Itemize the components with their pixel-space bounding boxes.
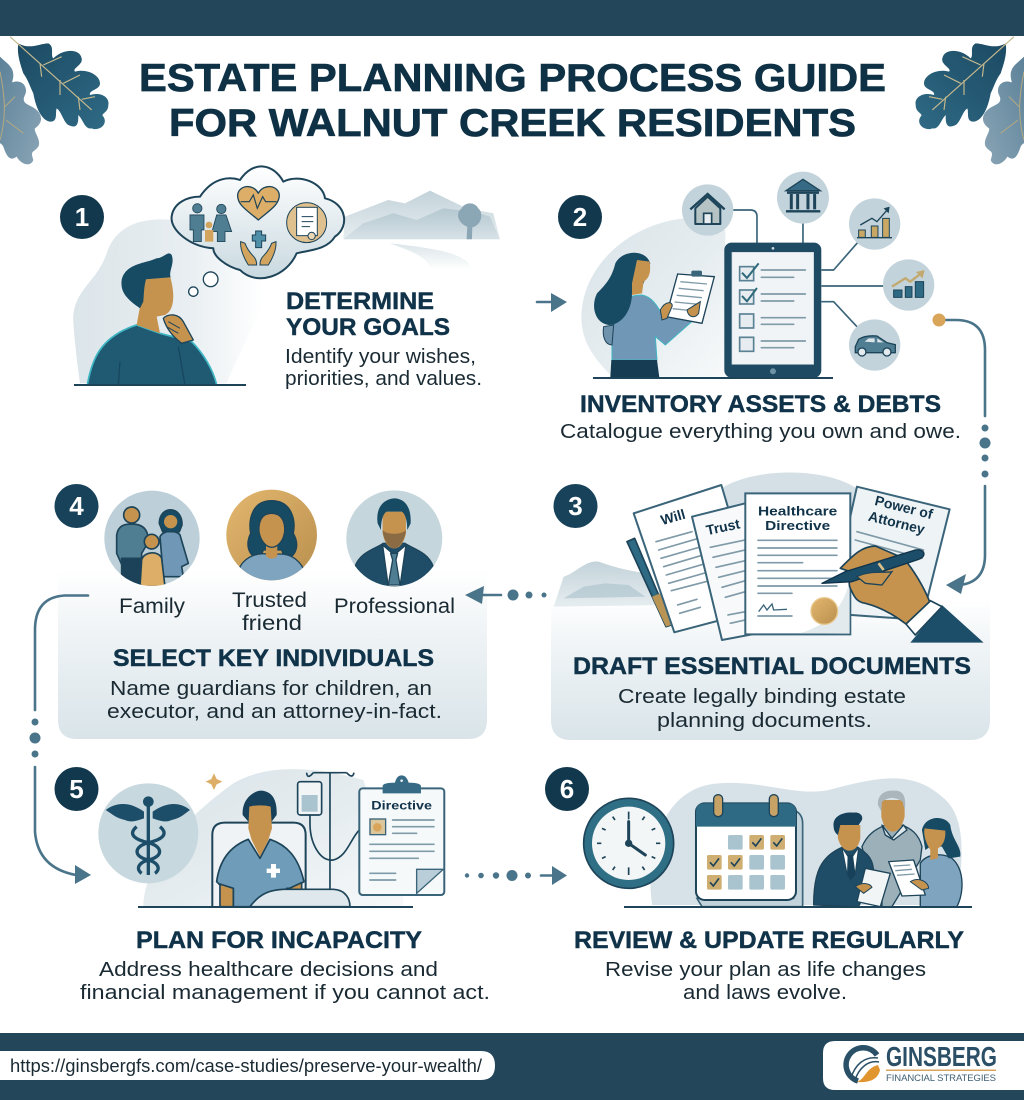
panel: step 3 draft essential documents bbox=[551, 472, 990, 740]
heading: DRAFT ESSENTIAL DOCUMENTS bbox=[573, 653, 971, 680]
description bbox=[618, 686, 906, 732]
description bbox=[285, 346, 482, 390]
icon: directive clipboard: Directive bbox=[371, 799, 432, 813]
ground line bbox=[138, 906, 413, 908]
description bbox=[107, 678, 442, 723]
description: Address healthcare decisions and bbox=[99, 959, 438, 981]
source url pill bbox=[0, 1051, 495, 1080]
ground line bbox=[593, 377, 833, 379]
icon: directive clipboard bbox=[359, 775, 444, 895]
title bbox=[139, 57, 886, 145]
step number badge 6: 6 bbox=[560, 774, 574, 804]
portrait labels bbox=[119, 589, 455, 635]
icon: clock bbox=[584, 798, 674, 888]
step number badge 2 bbox=[558, 195, 602, 239]
logo: Ginsberg Financial Strategies bbox=[823, 1041, 1024, 1090]
heading: PLAN FOR INCAPACITY bbox=[136, 927, 422, 954]
illustration: caduceus, hospital patient and directive bbox=[98, 769, 444, 907]
description: Name guardians for children, an bbox=[110, 678, 432, 700]
icon: hospital patient bbox=[212, 791, 350, 907]
step number badge 3 bbox=[554, 484, 598, 528]
portrait labels: friend bbox=[242, 612, 302, 635]
panel: step 4 select key individuals bbox=[54, 484, 487, 739]
description: financial management if you cannot act. bbox=[80, 982, 490, 1004]
ground line bbox=[624, 906, 972, 908]
heading: YOUR GOALS bbox=[286, 314, 450, 341]
illustration: legal documents and signing hand: Directive bbox=[765, 518, 830, 533]
description: planning documents. bbox=[657, 710, 872, 732]
source url pill: https://ginsbergfs.com/case-studies/preserve-your-wealth/ bbox=[10, 1056, 482, 1076]
connector: step 4 to 5 bbox=[30, 596, 91, 884]
oak leaves: top right bbox=[915, 37, 1024, 164]
oak leaves: top left bbox=[0, 37, 109, 164]
step number badge 5 bbox=[54, 767, 98, 811]
illustration: legal documents and signing hand: Attorney bbox=[867, 508, 927, 537]
description: Catalogue everything you own and owe. bbox=[560, 421, 961, 443]
step number badge 6 bbox=[545, 767, 589, 811]
description: priorities, and values. bbox=[285, 368, 482, 390]
title: ESTATE PLANNING PROCESS GUIDE bbox=[139, 57, 886, 100]
top header bar bbox=[0, 0, 1024, 36]
description: Create legally binding estate bbox=[618, 686, 906, 708]
step number badge 5: 5 bbox=[69, 774, 84, 804]
portrait labels: Trusted bbox=[232, 589, 307, 612]
icon: professional bbox=[346, 490, 442, 590]
panel: step 6 review and update regularly bbox=[545, 767, 972, 1004]
description: Revise your plan as life changes bbox=[605, 959, 926, 981]
heading: REVIEW & UPDATE REGULARLY bbox=[574, 927, 964, 954]
icon: advisors with documents bbox=[814, 791, 962, 907]
icon: family bbox=[104, 491, 200, 587]
description: Identify your wishes, bbox=[285, 346, 476, 368]
panel: step 1 determine your goals bbox=[60, 166, 500, 390]
icon: IV stand bbox=[298, 773, 359, 889]
description: and laws evolve. bbox=[683, 982, 847, 1004]
heading: INVENTORY ASSETS & DEBTS bbox=[580, 391, 941, 418]
illustration: legal documents and signing hand: Power of bbox=[873, 492, 935, 522]
illustration: woman, tablet checklist and asset icons bbox=[581, 172, 934, 378]
step number badge 1 bbox=[60, 195, 104, 239]
step number badge 1: 1 bbox=[75, 202, 89, 232]
arrow: step 3 to 4 bbox=[465, 586, 546, 604]
step number badge 3: 3 bbox=[568, 491, 583, 521]
icon: trusted friend bbox=[226, 490, 317, 583]
panel background bbox=[58, 570, 487, 739]
step number badge 4: 4 bbox=[69, 491, 84, 521]
connector: step 2 to 3 bbox=[932, 314, 990, 594]
ground line bbox=[74, 384, 246, 386]
heading bbox=[286, 288, 450, 341]
icon: G mark bbox=[846, 1048, 880, 1082]
description bbox=[80, 959, 490, 1004]
panel background bbox=[551, 600, 990, 740]
illustration: legal documents and signing hand bbox=[554, 472, 984, 643]
illustration: clock, calendar and advisors bbox=[584, 778, 962, 907]
icon: calendar bbox=[696, 795, 803, 907]
description bbox=[605, 959, 926, 1004]
portrait labels: Family bbox=[119, 595, 186, 618]
panel: step 2 inventory assets and debts bbox=[558, 172, 961, 443]
illustration: legal documents and signing hand: Will bbox=[659, 506, 687, 528]
panel: step 5 plan for incapacity bbox=[54, 767, 490, 1004]
arrow: step 1 to 2 bbox=[537, 293, 567, 312]
heading: DETERMINE bbox=[286, 288, 434, 315]
description: executor, and an attorney-in-fact. bbox=[107, 701, 442, 723]
portrait labels: Professional bbox=[334, 595, 455, 618]
icon: caduceus bbox=[98, 783, 198, 883]
illustration: legal documents and signing hand: Trust bbox=[705, 515, 742, 538]
arrow: step 5 to 6 bbox=[465, 866, 567, 885]
icon: sparkle bbox=[206, 773, 222, 790]
step number badge 2: 2 bbox=[573, 202, 587, 232]
step number badge 4 bbox=[54, 484, 98, 528]
heading: SELECT KEY INDIVIDUALS bbox=[113, 645, 434, 672]
illustration: legal documents and signing hand: Healthcare bbox=[758, 503, 837, 518]
illustration: thinking person with thought cloud bbox=[73, 166, 500, 385]
tablet checklist bbox=[724, 243, 821, 378]
illustration: family, friend, professional portraits bbox=[104, 490, 442, 590]
title: FOR WALNUT CREEK RESIDENTS bbox=[169, 102, 856, 145]
footer bar bbox=[0, 1033, 1024, 1100]
logo: Ginsberg Financial Strategies: FINANCIAL STRATEGIES bbox=[886, 1073, 996, 1084]
